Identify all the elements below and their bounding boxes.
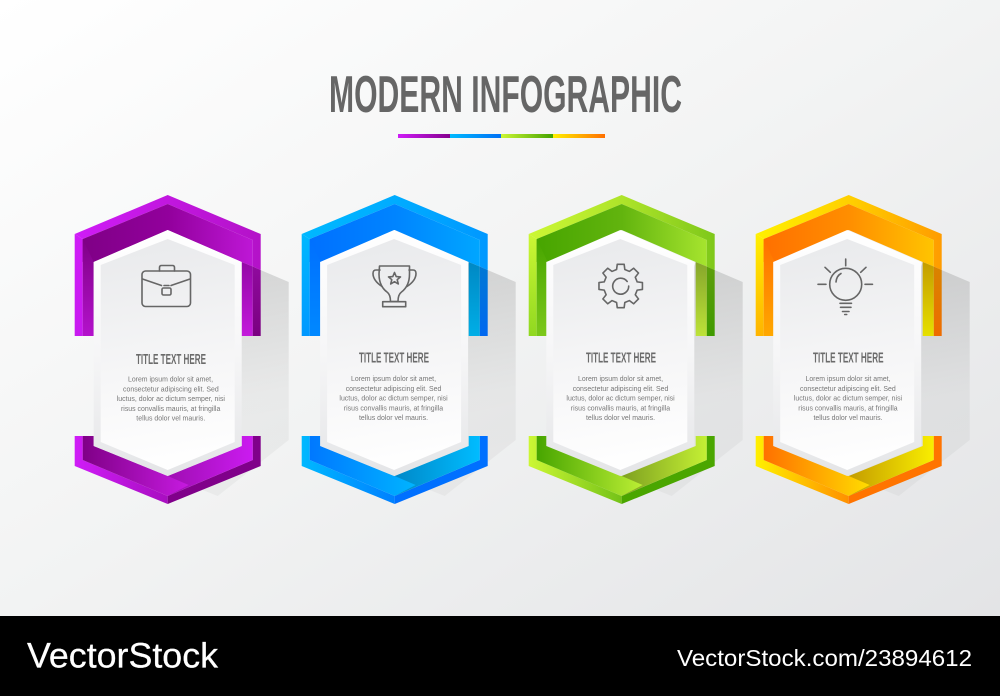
card body text (339, 374, 448, 422)
card body text: risus convallis mauris, at fringilla (798, 403, 898, 412)
card body text: Lorem ipsum dolor sit amet, (806, 374, 890, 383)
card body text: luctus, dolor ac dictum semper, nisi (794, 394, 902, 403)
card body text: consectetur adipiscing elit. Sed (800, 384, 896, 393)
card body text: luctus, dolor ac dictum semper, nisi (117, 394, 225, 403)
card body text: Lorem ipsum dolor sit amet, (578, 374, 663, 383)
card title: TITLE TEXT HERE (586, 350, 656, 367)
title: MODERN INFOGRAPHIC (329, 66, 682, 124)
panel: orange hexagon card (756, 195, 970, 504)
card body text: tellus dolor vel mauris. (359, 413, 428, 422)
card body text: consectetur adipiscing elit. Sed (123, 384, 219, 393)
card title: TITLE TEXT HERE (136, 351, 206, 368)
card body text (566, 374, 675, 422)
card body text: consectetur adipiscing elit. Sed (573, 384, 668, 393)
panel: blue hexagon card (302, 195, 516, 504)
card title: TITLE TEXT HERE (359, 350, 429, 367)
footer bar (0, 616, 1000, 696)
card body text: tellus dolor vel mauris. (136, 414, 205, 423)
card body text: consectetur adipiscing elit. Sed (346, 384, 441, 393)
panel: purple hexagon card (75, 195, 289, 504)
card body text: luctus, dolor ac dictum semper, nisi (566, 394, 675, 403)
card body text: risus convallis mauris, at fringilla (121, 404, 221, 413)
icon: trophy (373, 266, 416, 307)
card body text: tellus dolor vel mauris. (586, 413, 655, 422)
card body text: luctus, dolor ac dictum semper, nisi (339, 394, 448, 403)
card body text: Lorem ipsum dolor sit amet, (351, 374, 436, 383)
footer url text: VectorStock.com/23894612 (677, 645, 972, 671)
card body text: risus convallis mauris, at fringilla (571, 403, 671, 412)
icon: light bulb (818, 259, 872, 314)
icon: gear (599, 264, 642, 308)
title underline: four colour bar (398, 134, 605, 138)
icon: briefcase (142, 266, 190, 306)
card body text: risus convallis mauris, at fringilla (344, 403, 444, 412)
card body text (794, 374, 902, 422)
card title: TITLE TEXT HERE (813, 350, 884, 367)
card body text: Lorem ipsum dolor sit amet, (128, 374, 213, 384)
footer logo text: VectorStock (27, 637, 219, 676)
card body text: tellus dolor vel mauris. (814, 413, 882, 422)
card body text (117, 374, 225, 423)
panel: green hexagon card (529, 195, 743, 504)
